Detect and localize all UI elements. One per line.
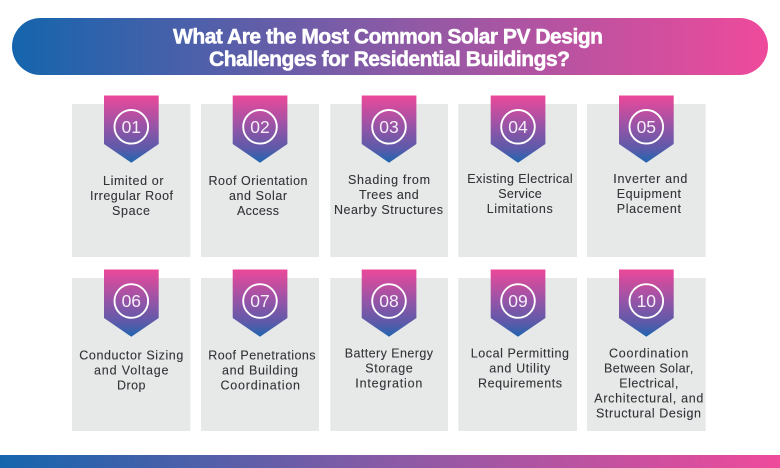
label 07: Coordination bbox=[220, 378, 300, 392]
panel: 10 coordination bbox=[587, 270, 706, 431]
badge 06 bbox=[104, 270, 159, 337]
panel: 05 inverter placement bbox=[587, 96, 706, 257]
label 06: Drop bbox=[117, 378, 146, 392]
badge 10 bbox=[619, 270, 674, 337]
title: Challenges for Residential Buildings? bbox=[209, 48, 570, 71]
label 07: and Building bbox=[222, 363, 298, 377]
label 09 bbox=[471, 346, 569, 390]
label 09: Local Permitting bbox=[471, 346, 569, 360]
title banner bbox=[12, 18, 768, 75]
label 02: Roof Orientation bbox=[208, 174, 308, 188]
badge 07: 07 bbox=[250, 291, 270, 311]
label 01: Irregular Roof bbox=[90, 189, 174, 203]
panel: 08 battery storage bbox=[330, 270, 448, 431]
label 04: Service bbox=[498, 187, 542, 201]
label 02: and Solar bbox=[229, 189, 287, 203]
badge 04: 04 bbox=[508, 117, 528, 137]
badge 01: 01 bbox=[122, 117, 141, 137]
badge 02 bbox=[233, 96, 287, 163]
label 09: and Utility bbox=[489, 361, 551, 375]
label 10: Architectural, and bbox=[594, 391, 703, 405]
label 04: Existing Electrical bbox=[467, 172, 573, 186]
panel: 04 electrical service bbox=[458, 96, 577, 257]
bottom gradient bar bbox=[0, 455, 780, 468]
label 10: Coordination bbox=[609, 346, 688, 360]
label 10: Structural Design bbox=[596, 406, 701, 420]
label 04: Limitations bbox=[487, 202, 553, 216]
label 08: Storage bbox=[365, 361, 413, 375]
badge 10: 10 bbox=[637, 291, 656, 311]
label 06: and Voltage bbox=[94, 363, 169, 377]
badge 01 bbox=[104, 96, 159, 163]
label 09: Requirements bbox=[478, 376, 562, 390]
label 06 bbox=[79, 348, 183, 392]
label 05 bbox=[613, 172, 687, 216]
title bbox=[173, 26, 603, 71]
badge 02: 02 bbox=[250, 117, 270, 137]
panel: 02 roof orientation bbox=[201, 96, 319, 257]
label 10 bbox=[594, 346, 703, 420]
label 02 bbox=[208, 174, 308, 218]
label 10: Electrical, bbox=[619, 376, 678, 390]
badge 06: 06 bbox=[122, 291, 141, 311]
badge 08 bbox=[362, 270, 416, 337]
label 03: Nearby Structures bbox=[334, 203, 443, 217]
panel: 01 limited roof space bbox=[72, 96, 190, 257]
label 06: Conductor Sizing bbox=[79, 348, 183, 362]
label 03: Shading from bbox=[348, 173, 430, 187]
label 08: Integration bbox=[355, 376, 422, 390]
label 02: Access bbox=[237, 204, 279, 218]
badge 09 bbox=[491, 270, 545, 337]
label 03 bbox=[334, 173, 443, 217]
label 01: Limited or bbox=[103, 174, 164, 188]
panel: 07 roof penetrations bbox=[201, 270, 319, 431]
label 08: Battery Energy bbox=[345, 346, 434, 360]
panel: 03 shading bbox=[330, 96, 448, 257]
label 05: Placement bbox=[617, 202, 682, 216]
label 01: Space bbox=[112, 204, 150, 218]
badge 05: 05 bbox=[637, 117, 656, 137]
label 07 bbox=[208, 348, 316, 392]
badge 09: 09 bbox=[508, 291, 528, 311]
label 05: Inverter and bbox=[613, 172, 687, 186]
badge 03: 03 bbox=[379, 117, 399, 137]
title: What Are the Most Common Solar PV Design bbox=[173, 26, 603, 48]
badge 03 bbox=[362, 96, 416, 163]
badge 04 bbox=[491, 96, 545, 163]
label 08 bbox=[345, 346, 434, 390]
label 05: Equipment bbox=[617, 187, 682, 201]
label 01 bbox=[90, 174, 174, 218]
label 07: Roof Penetrations bbox=[208, 348, 316, 362]
badge 07 bbox=[233, 270, 287, 337]
label 04 bbox=[467, 172, 573, 216]
panel: 06 conductor sizing bbox=[72, 270, 190, 431]
badge 08: 08 bbox=[379, 291, 399, 311]
panel: 09 permitting bbox=[458, 270, 577, 431]
badge 05 bbox=[619, 96, 674, 163]
label 10: Between Solar, bbox=[604, 361, 693, 375]
label 03: Trees and bbox=[359, 188, 419, 202]
